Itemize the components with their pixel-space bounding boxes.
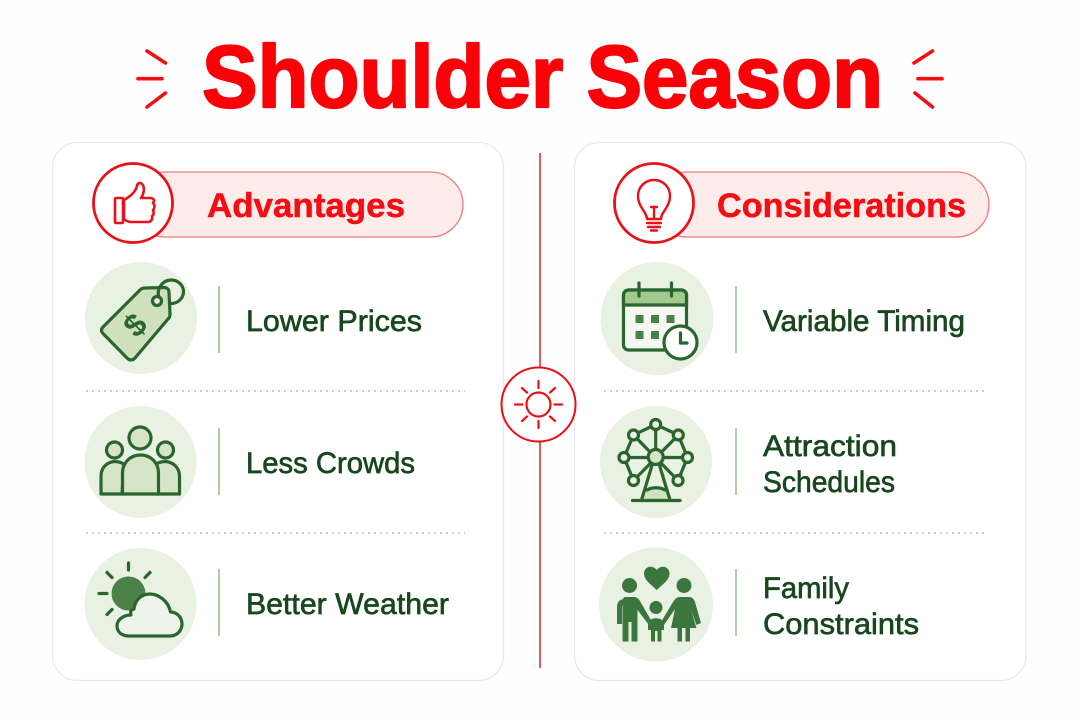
heading: advantages: Advantages — [207, 187, 405, 225]
header: advantages — [94, 164, 463, 242]
item: better weather — [84, 548, 449, 660]
item: better weather: Better Weather — [246, 588, 449, 621]
icon: price tag — [102, 280, 184, 360]
item: less crowds — [84, 406, 415, 518]
item: family constraints: Family — [763, 572, 849, 605]
item: attraction schedules — [600, 406, 897, 518]
icon: family with heart — [617, 567, 701, 642]
title: Shoulder Season — [202, 27, 883, 126]
item: attraction schedules: Schedules — [763, 466, 895, 499]
item: family constraints: Constraints — [763, 608, 919, 641]
item: family constraints — [599, 548, 919, 662]
item: lower prices: Lower Prices — [246, 305, 422, 338]
item: variable timing — [600, 262, 965, 375]
center divider line — [539, 153, 541, 668]
panel: advantages — [52, 142, 504, 680]
icon: ferris wheel — [619, 420, 692, 500]
heading: considerations: Considerations — [717, 187, 966, 225]
icon: light bulb — [638, 180, 670, 230]
icon: price tag: $ — [116, 306, 154, 344]
icon: thumbs up — [115, 183, 154, 223]
icon: center sun — [502, 368, 576, 442]
item: attraction schedules: Attraction — [763, 430, 897, 463]
item: variable timing: Variable Timing — [763, 305, 965, 338]
item: lower prices — [85, 262, 422, 374]
icon: left title rays — [138, 51, 166, 107]
icon: right title rays — [914, 51, 942, 107]
icon: calendar with clock — [624, 283, 697, 359]
icon: sun and cloud — [99, 563, 182, 636]
icon: people — [101, 427, 180, 494]
item: less crowds: Less Crowds — [246, 447, 415, 480]
header: considerations — [614, 164, 989, 242]
panel: considerations — [574, 142, 1026, 680]
